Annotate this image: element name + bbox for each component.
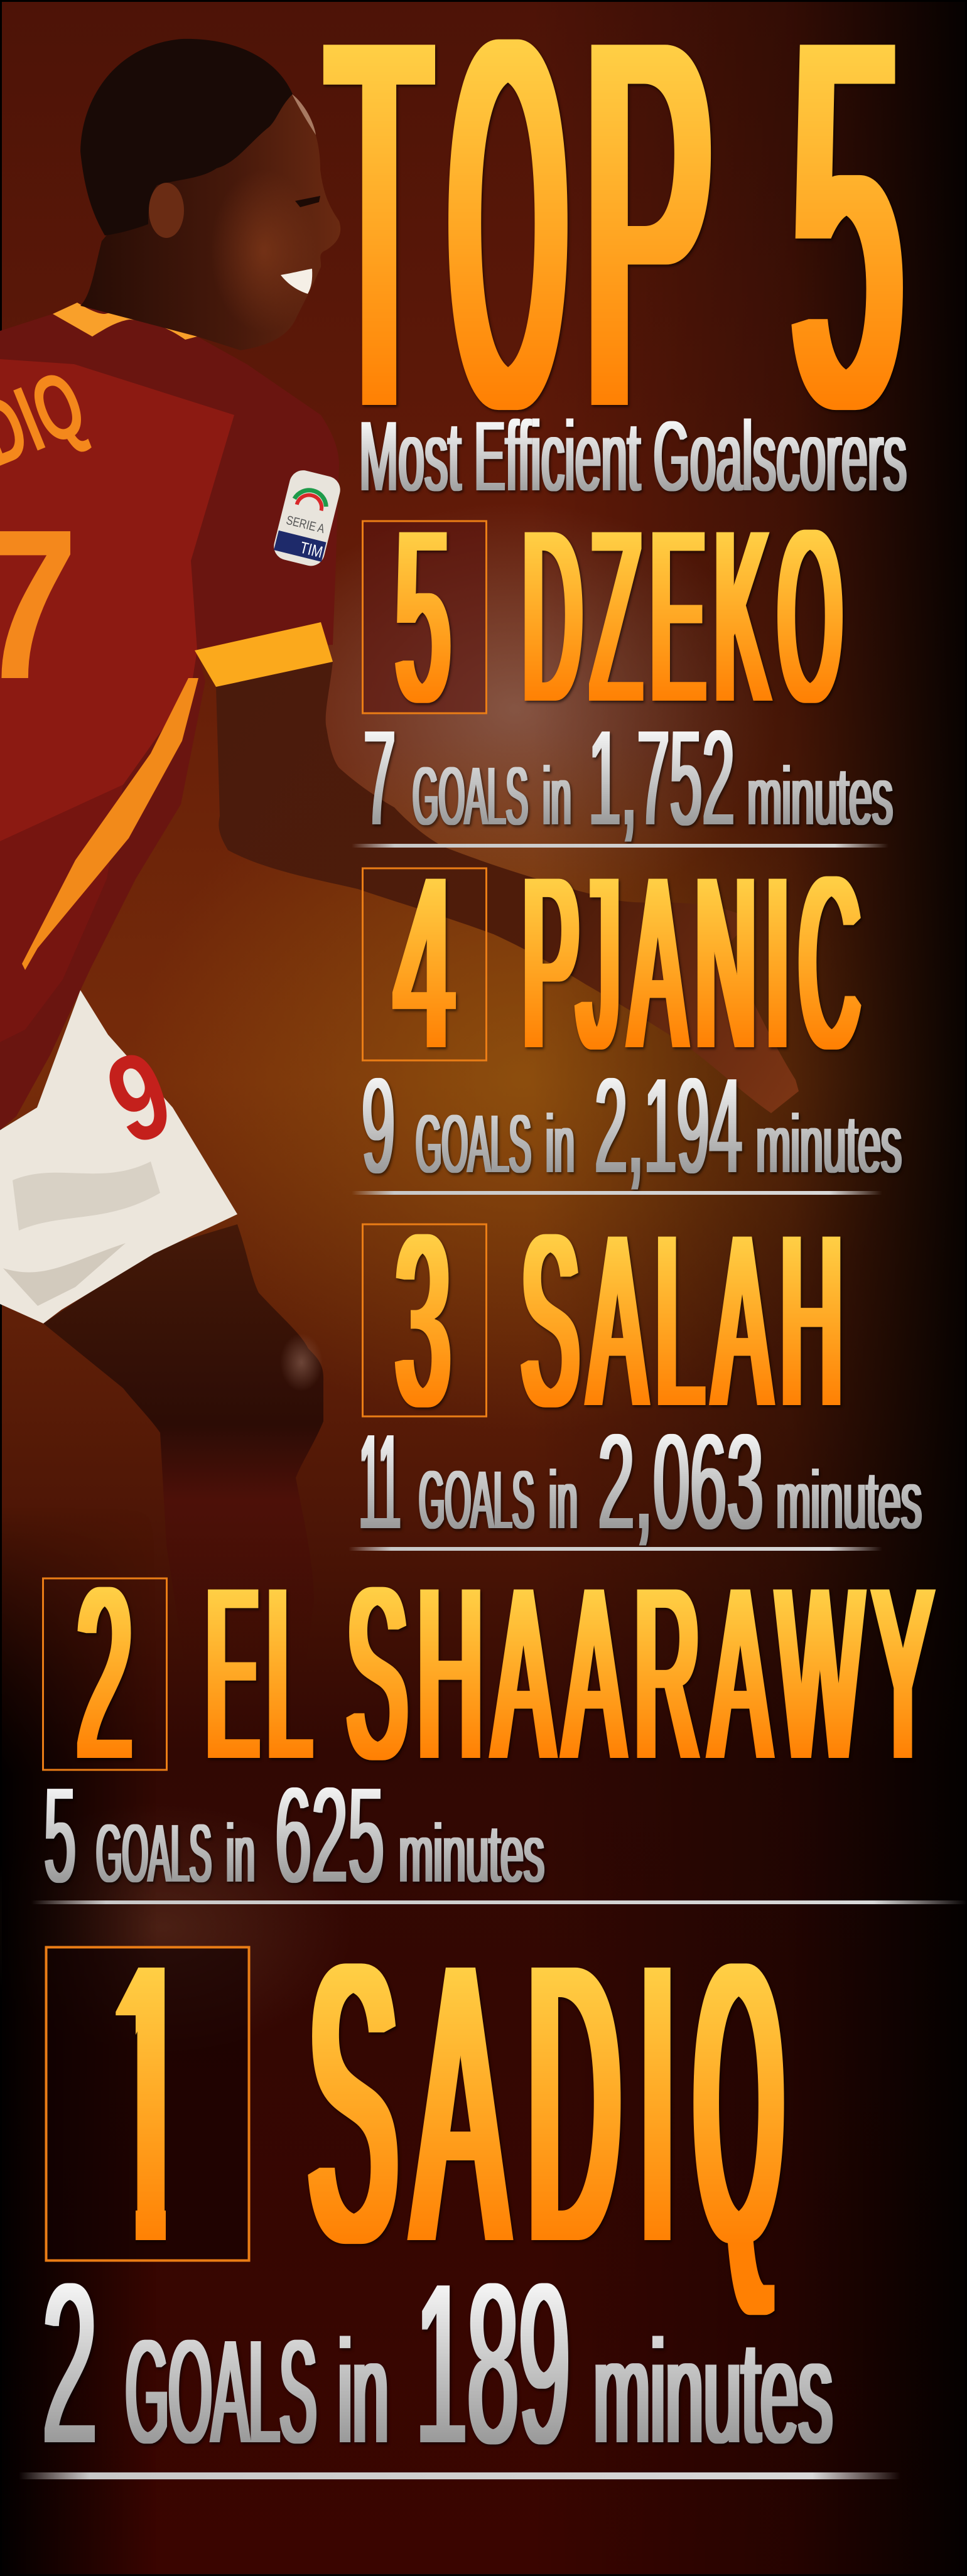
- divider 4: [352, 1191, 882, 1195]
- stats Salah: 2,063: [598, 1406, 764, 1557]
- rank box 4: [363, 868, 486, 1060]
- stats Salah: [359, 1406, 922, 1557]
- rank 1 entry: [44, 1946, 834, 2447]
- rank 5 entry: [363, 479, 893, 853]
- jersey stripe: [22, 678, 198, 970]
- divider 5: [352, 844, 889, 848]
- rank 1 entry: 1: [110, 1882, 187, 2324]
- stats Salah: in: [549, 1453, 578, 1546]
- eye and brow: [295, 196, 320, 207]
- stats Dzeko: 1,752: [588, 702, 735, 853]
- stats Pjanic: 2,194: [595, 1050, 742, 1201]
- Serie A patch: [271, 467, 343, 569]
- rank box 2: [43, 1578, 167, 1770]
- head: [80, 39, 340, 350]
- player name Sadiq: S: [310, 1882, 396, 2324]
- rank 2 entry: [43, 1536, 944, 1910]
- player name Sadiq: [310, 1882, 782, 2324]
- stats El Shaarawy: 5: [44, 1759, 76, 1910]
- rank 2 entry: 2: [77, 1536, 132, 1810]
- leg: [43, 1224, 323, 1670]
- rank 4 entry: [362, 826, 902, 1201]
- stats El Shaarawy: GOALS: [96, 1807, 212, 1899]
- ear: [149, 183, 184, 238]
- stats Sadiq: 189: [416, 2236, 570, 2491]
- collar: [53, 303, 197, 340]
- rank box 1: [46, 1948, 249, 2260]
- rank box 3: [363, 1224, 486, 1416]
- stats Dzeko: in: [543, 750, 571, 842]
- stats Sadiq: GOALS: [126, 2309, 316, 2474]
- rank 3 entry: 3: [396, 1183, 450, 1457]
- stats Dzeko: [364, 702, 893, 853]
- stats Pjanic: [362, 1050, 902, 1201]
- stats Dzeko: 7: [364, 702, 396, 853]
- shorts: [0, 990, 237, 1323]
- Serie A patch: TIM: [298, 538, 325, 561]
- shorts number: 9: [91, 1024, 188, 1170]
- divider 1: [19, 2472, 900, 2479]
- player name El Shaarawy: EL: [207, 1536, 320, 1810]
- stats Dzeko: GOALS: [413, 750, 528, 842]
- divider 2: [31, 1900, 967, 1904]
- rank 3 entry: [359, 1183, 922, 1557]
- jersey: [0, 303, 343, 1130]
- rank box 5: [363, 521, 486, 713]
- divider 3: [348, 1547, 882, 1551]
- stats El Shaarawy: in: [226, 1807, 255, 1899]
- rank 4 entry: 4: [395, 826, 454, 1099]
- player name Sadiq: I: [641, 1882, 674, 2324]
- stats Sadiq: in: [338, 2309, 389, 2474]
- stats Salah: 11: [359, 1406, 401, 1557]
- stats Sadiq: 2: [42, 2236, 97, 2491]
- arm: [216, 662, 799, 1113]
- stats Sadiq: [42, 2236, 833, 2491]
- rank 5 entry: 5: [396, 479, 450, 753]
- Serie A patch: SERIE A: [285, 514, 327, 536]
- stats Pjanic: in: [546, 1097, 575, 1190]
- sleeve cuff: [195, 622, 333, 687]
- stats El Shaarawy: [44, 1759, 544, 1910]
- stats El Shaarawy: 625: [275, 1759, 384, 1910]
- stats Pjanic: 9: [362, 1050, 395, 1201]
- hair: [80, 39, 293, 235]
- stats El Shaarawy: minutes: [399, 1807, 544, 1899]
- player photo illustration: [0, 39, 799, 1670]
- player name Sadiq: D: [529, 1882, 619, 2324]
- smile: [281, 269, 312, 294]
- player name Sadiq: A: [414, 1882, 507, 2324]
- stats Pjanic: GOALS: [416, 1097, 531, 1190]
- stats Salah: GOALS: [419, 1453, 534, 1546]
